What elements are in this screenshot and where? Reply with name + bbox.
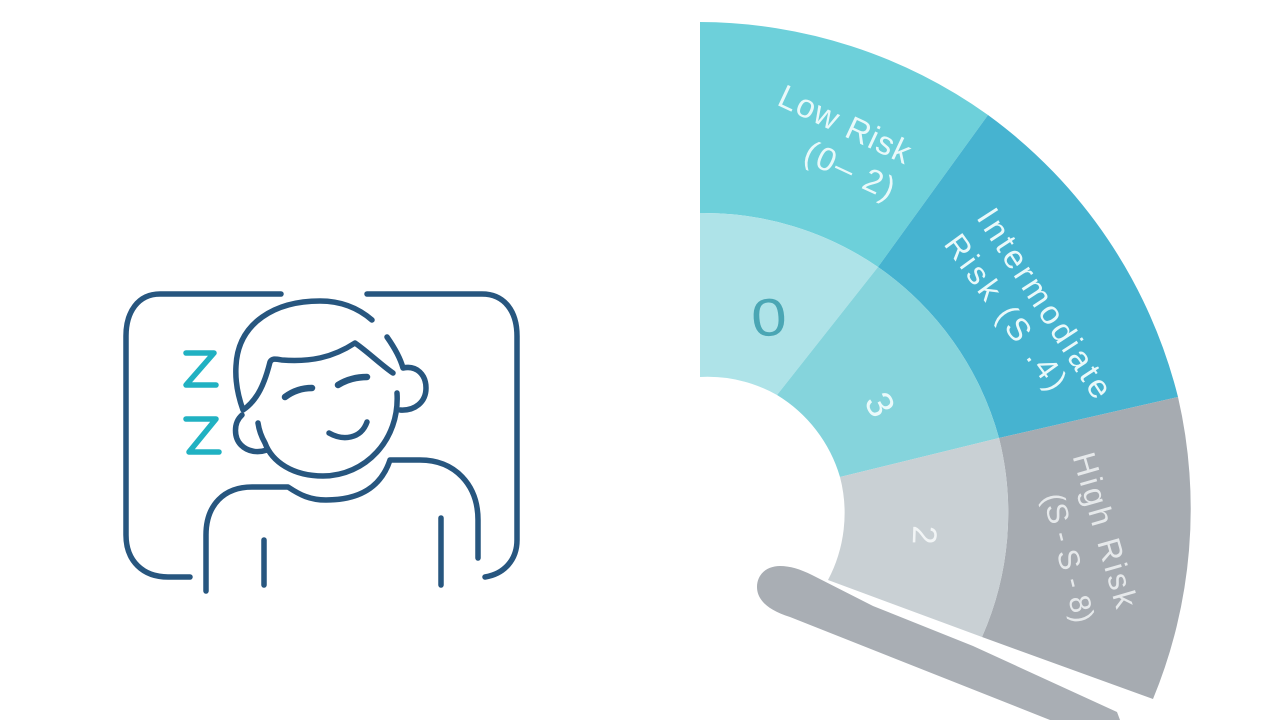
segment: score 2 inner <box>828 438 1008 637</box>
right eye <box>338 377 367 385</box>
left arm line <box>261 540 267 585</box>
icon: lower Z <box>186 419 219 452</box>
smile <box>329 422 367 438</box>
icon: sleeping person <box>126 294 517 591</box>
score: 3: 3 <box>855 386 903 424</box>
segment: score 0 inner <box>700 213 878 395</box>
segment: intermediate risk outer <box>878 115 1178 438</box>
label: Intermediate: Intermodiate <box>970 201 1120 405</box>
hair side tuft and right ear <box>387 337 426 410</box>
score: 0: 0 <box>749 288 789 348</box>
segment: score 3 inner <box>777 267 999 477</box>
shoulders and torso <box>206 460 478 591</box>
icon frame: right bracket <box>367 294 517 577</box>
segment: high risk outer <box>982 397 1191 699</box>
label: Low Risk: Low Risk <box>773 77 918 171</box>
left eye <box>285 388 312 397</box>
label: High Risk: High Risk <box>1066 448 1145 613</box>
left ear <box>236 415 267 452</box>
face outline <box>258 393 397 476</box>
label: low range: (0– 2) <box>799 133 901 207</box>
chart: risk fan gauge <box>700 22 1191 720</box>
segment: low risk outer <box>700 22 988 267</box>
icon: upper Z <box>186 353 216 385</box>
icon frame: left bracket <box>126 294 281 577</box>
hair <box>236 301 393 410</box>
score: 2: 2 <box>905 525 943 545</box>
label: high range: (S - S - 8) <box>1036 490 1100 626</box>
gauge needle <box>757 566 1120 720</box>
right arm line <box>438 518 444 585</box>
label: Risk and intermediate range: Risk (S .4) <box>937 227 1075 397</box>
